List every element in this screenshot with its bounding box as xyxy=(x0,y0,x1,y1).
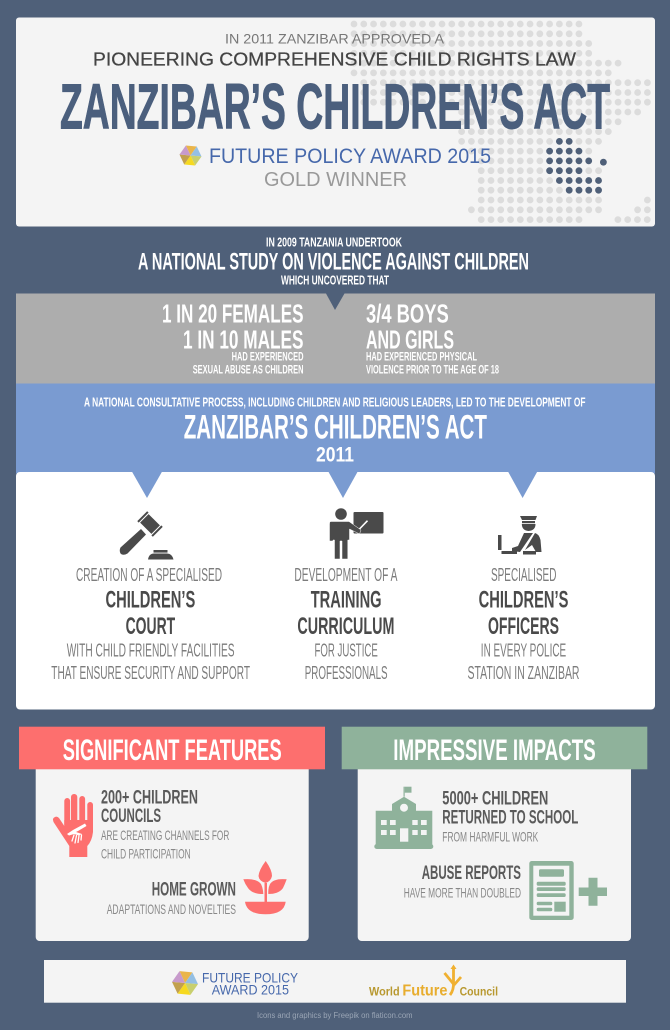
column: court: WITH CHILD FRIENDLY FACILITIES xyxy=(67,641,235,661)
world future council wordmark xyxy=(369,982,498,999)
arrow: to curriculum xyxy=(328,471,358,498)
heading band xyxy=(19,727,325,769)
text: children returned: FROM HARMFUL WORK xyxy=(442,829,539,845)
statistic: sexual abuse: HAD EXPERIENCED xyxy=(232,350,304,364)
column: officers: OFFICERS xyxy=(488,613,559,640)
statistic: sexual abuse: 1 IN 10 MALES xyxy=(183,324,304,354)
column: officers: SPECIALISED xyxy=(491,565,556,585)
text: abuse reports: ABUSE REPORTS xyxy=(422,862,521,884)
icon: award logo xyxy=(172,971,198,995)
icon: award logo xyxy=(180,145,202,166)
study intro heading: WHICH UNCOVERED THAT xyxy=(281,272,389,287)
icon: document xyxy=(529,861,574,920)
text: children returned xyxy=(442,787,578,845)
heading band xyxy=(342,727,647,769)
subtitle: PIONEERING COMPREHENSIVE CHILD RIGHTS LAW xyxy=(93,50,576,70)
column: curriculum: CURRICULUM xyxy=(297,613,394,640)
arrow: to officers xyxy=(508,471,538,498)
column: officers: CHILDREN’S xyxy=(479,586,568,613)
icon: teacher xyxy=(330,508,384,559)
icon: hand xyxy=(53,794,93,857)
text: abuse reports xyxy=(404,862,521,900)
arrow: notch xyxy=(326,294,344,310)
gold winner: GOLD WINNER xyxy=(264,169,407,191)
text: children councils: ARE CREATING CHANNELS FOR xyxy=(101,827,229,843)
intro line: IN 2011 ZANZIBAR APPROVED A xyxy=(225,30,445,46)
text: children councils: 200+ CHILDREN xyxy=(101,786,198,808)
text: children councils: CHILD PARTICIPATION xyxy=(101,845,191,861)
world future council wordmark: World xyxy=(369,984,400,998)
icon: police officer xyxy=(498,516,542,554)
column: curriculum xyxy=(294,565,397,683)
column: curriculum: FOR JUSTICE xyxy=(314,641,378,661)
statistic: physical violence: VIOLENCE PRIOR TO THE AGE OF 18 xyxy=(366,362,499,376)
statistic: sexual abuse: 1 IN 20 FEMALES xyxy=(162,298,304,328)
text: children councils xyxy=(101,786,229,861)
dotted map of Tanzania xyxy=(354,24,648,220)
text: home grown: ADAPTATIONS AND NOVELTIES xyxy=(107,901,236,917)
icon: tree xyxy=(444,964,461,995)
award wordmark: FUTURE POLICY xyxy=(202,970,299,986)
arrow: to court xyxy=(132,471,162,498)
panel: act band: ZANZIBAR’S CHILDREN’S ACT xyxy=(184,408,487,446)
statistic: physical violence xyxy=(366,298,499,376)
column: curriculum: PROFESSIONALS xyxy=(305,663,388,683)
panel: act band xyxy=(16,384,655,474)
study intro heading xyxy=(138,234,529,287)
study intro heading: IN 2009 TANZANIA UNDERTOOK xyxy=(266,234,402,249)
statistic: physical violence: HAD EXPERIENCED PHYSICAL xyxy=(366,350,477,364)
text: children returned: 5000+ CHILDREN xyxy=(442,787,548,809)
text: children returned: RETURNED TO SCHOOL xyxy=(442,806,578,828)
column: curriculum: DEVELOPMENT OF A xyxy=(294,565,397,585)
panel: statistics band xyxy=(16,294,655,384)
award wordmark xyxy=(202,970,299,998)
statistic: sexual abuse xyxy=(162,298,304,376)
credit line: Icons and graphics by Freepik on flaticon.com xyxy=(257,1011,413,1020)
panel: header xyxy=(16,18,655,226)
statistic: sexual abuse: SEXUAL ABUSE AS CHILDREN xyxy=(193,362,304,376)
award name: FUTURE POLICY AWARD 2015 xyxy=(209,145,491,168)
world future council wordmark: Future xyxy=(402,982,448,999)
text: home grown xyxy=(107,879,236,917)
icon: plant xyxy=(243,861,287,914)
world future council wordmark: Council xyxy=(460,984,498,998)
statistic: physical violence: AND GIRLS xyxy=(366,324,454,354)
panel: impressive impacts xyxy=(342,727,647,941)
icon: gavel xyxy=(120,511,174,560)
text: children councils: COUNCILS xyxy=(101,805,161,827)
column: court: COURT xyxy=(126,613,175,640)
panel: significant features xyxy=(19,727,325,941)
column: court: CREATION OF A SPECIALISED xyxy=(76,565,222,585)
column: court: CHILDREN’S xyxy=(106,586,195,613)
text: abuse reports: HAVE MORE THAN DOUBLED xyxy=(404,884,521,900)
heading: SIGNIFICANT FEATURES xyxy=(63,734,282,767)
statistic: physical violence: 3/4 BOYS xyxy=(366,298,449,328)
panel: act provisions xyxy=(16,471,655,710)
column: court xyxy=(51,565,250,683)
icon: plus xyxy=(579,878,607,906)
column: court: THAT ENSURE SECURITY AND SUPPORT xyxy=(51,663,250,683)
award wordmark: AWARD 2015 xyxy=(212,982,289,998)
column: curriculum: TRAINING xyxy=(311,586,382,613)
panel: act band: 2011 xyxy=(316,444,354,467)
column: officers: IN EVERY POLICE xyxy=(481,641,566,661)
icon: school xyxy=(374,787,433,849)
column: officers xyxy=(468,565,580,683)
column: officers: STATION IN ZANZIBAR xyxy=(468,663,580,683)
panel: footer logos xyxy=(44,960,626,1003)
text: home grown: HOME GROWN xyxy=(152,879,236,901)
